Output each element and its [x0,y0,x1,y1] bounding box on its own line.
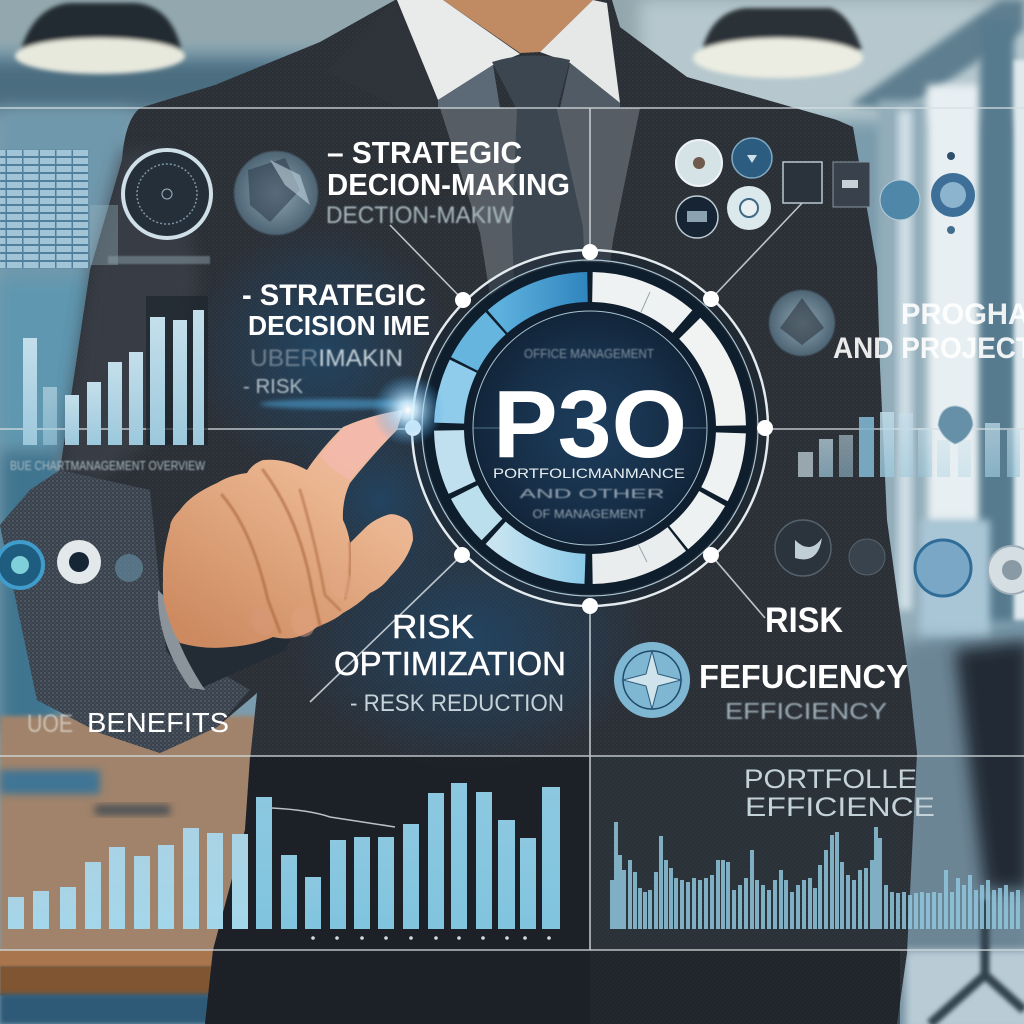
wooden table [0,716,270,1024]
connector nodes [405,244,773,614]
heading: strategic decision-making top: DECION-MAKING [327,167,570,202]
heading: strategic decision left: DECISION IME [248,310,430,341]
finger creases [222,470,350,632]
ring segments [449,287,731,569]
label: portfolio efficiency: EFFICIENCE [745,792,935,822]
label: portfolio efficiency [744,764,935,822]
shirt and jacket cuff [158,590,292,690]
label: use benefits: BENEFITS [87,707,229,738]
progress ring [412,250,768,606]
icons lower right [775,520,1024,596]
heat grid chart top left [0,150,210,268]
heading: risk optimization: - RESK REDUCTION [350,690,564,717]
center caption: PORTFOLICMANMANCE [493,465,685,481]
center title P3O: P3O [493,371,687,478]
label: portfolio efficiency: PORTFOLLE [744,764,917,794]
heading: risk efficiency: FEFUCIENCY [699,658,908,695]
spiky bar chart bottom right [612,822,1018,929]
heading: risk efficiency [699,601,908,724]
hand pointing at ring [163,410,413,648]
fingertip glow [372,374,444,446]
center caption: AND OTHER [520,486,664,501]
icon: target dial [123,150,211,238]
center caption [493,346,685,521]
heading: strategic decision-making top [326,135,570,229]
icon: compass badge [614,642,690,718]
heading: strategic decision left: - STRATEGIC [242,279,426,312]
heading: strategic decision left: - RISK [243,376,304,398]
label: use benefits [27,707,229,738]
neck [443,0,593,53]
heading: risk efficiency: RISK [765,601,843,640]
heading: strategic decision left [242,279,430,398]
heading: strategic decision left: UBERIMAKIN [250,345,403,372]
ceiling lamp left [15,3,185,74]
icon cluster top right [676,138,822,238]
bar chart mid right [798,412,1020,477]
icon: crystal globe [234,151,318,235]
center caption: OFFICE MANAGEMENT [524,346,654,361]
white shirt collar [397,0,620,108]
light streak from fingertip [260,399,420,409]
bar chart bottom left [8,783,560,940]
ceiling lamp right [693,8,863,78]
heading: risk efficiency: EFFICIENCY [725,698,887,724]
heading: risk optimization: OPTIMIZATION [334,645,566,682]
icon: crystal right [769,290,835,356]
heading: strategic decision-making top: – STRATEGIC [327,135,522,170]
icon: diamond shield right [938,406,973,444]
heading: program and project [833,298,1024,365]
necktie [492,55,586,300]
label: use benefits: UOE [27,710,73,738]
heading: strategic decision-making top: DECTION-MAKIW [326,202,514,229]
heading: risk optimization [334,608,566,717]
center caption: OF MANAGEMENT [532,507,646,521]
icons far right [833,152,975,234]
heading: risk optimization: RISK [392,608,474,645]
icons row left [0,540,143,588]
bar chart mid left [23,296,208,445]
caption under mid left chart: BUE CHARTMANAGEMENT OVERVIEW [10,458,206,473]
